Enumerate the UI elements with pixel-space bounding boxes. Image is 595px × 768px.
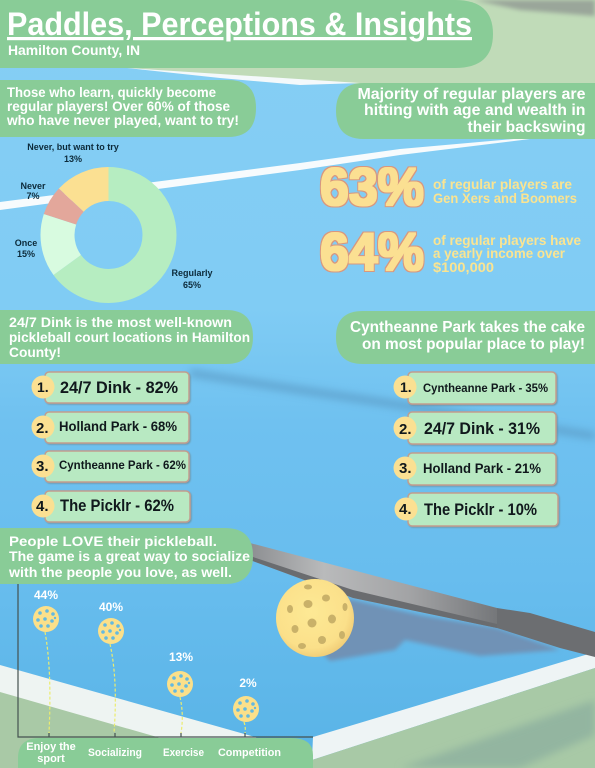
rank 1: 1. [400, 379, 412, 395]
rank 4: 4. [399, 501, 412, 518]
rank 4: The Picklr - 10% [424, 501, 537, 519]
rank 1: 1. [37, 379, 49, 395]
donut chart: player experience: Never [20, 181, 46, 191]
stat: 64 percent: a yearly income over [433, 246, 566, 261]
value: socializing [98, 600, 124, 644]
rank 2: 2. [36, 420, 49, 437]
rank 3: Cyntheanne Park - 62% [59, 460, 186, 472]
category label band: Enjoy the [26, 741, 76, 753]
stat: 63 percent: Gen Xers and Boomers [433, 191, 577, 206]
value: enjoy the sport: 44% [34, 588, 58, 602]
panel: title banner [0, 0, 493, 68]
panel: love pickleball callout: People LOVE their pickleball. [9, 533, 217, 549]
category label band: Socializing [88, 747, 142, 759]
panel: love pickleball callout: with the people you love, as well. [8, 564, 232, 580]
rank 2: 24/7 Dink - 31% [424, 420, 540, 438]
stat: 63 percent [320, 158, 577, 217]
panel: age and wealth callout: their backswing [468, 119, 586, 136]
value: competition [233, 676, 259, 722]
value: competition: 2% [239, 676, 257, 690]
paddle and ball scene [250, 543, 595, 661]
rank 3: 3. [399, 460, 412, 477]
value: socializing: 40% [99, 600, 123, 614]
panel: age and wealth callout: Majority of regular players are [358, 86, 586, 103]
panel: well-known courts callout: pickleball court locations in Hamilton [9, 329, 250, 345]
donut chart: player experience: 65% [183, 280, 201, 290]
subtitle: Hamilton County, IN [8, 42, 140, 58]
panel: well-known courts callout: 24/7 Dink is the most well-known [9, 314, 232, 330]
panel: learn callout: who have never played, want to try! [6, 113, 239, 128]
panel: popular courts callout: on most popular place to play! [362, 336, 585, 353]
donut chart: player experience: Regularly [171, 268, 213, 278]
panel: well-known courts callout: County! [9, 344, 61, 360]
panel: learn callout: Those who learn, quickly become [7, 85, 216, 100]
stems [45, 632, 245, 733]
chart axes [18, 580, 313, 737]
rank 2: Holland Park - 68% [59, 419, 177, 434]
rank 3 [394, 453, 556, 485]
rank 3: 3. [36, 458, 49, 475]
donut chart: player experience: 7% [26, 191, 40, 201]
ranked list: most popular courts [394, 372, 558, 526]
category label band: Exercise [163, 747, 204, 759]
donut chart: player experience: 15% [17, 249, 35, 259]
rank 4: The Picklr - 62% [60, 497, 174, 515]
panel: learn callout: regular players! Over 60% of those [7, 99, 230, 114]
panel: popular courts callout [336, 311, 595, 364]
donut chart: player experience [15, 142, 213, 307]
rank 4: 4. [36, 498, 49, 515]
rank 2: 2. [399, 421, 412, 438]
stat: 64 percent: $100,000 [433, 260, 494, 275]
panel: age and wealth callout [336, 83, 595, 139]
category label band: Competition [218, 747, 281, 759]
stat: 64 percent: 64% [320, 223, 424, 282]
rank 2 [394, 412, 556, 444]
rank 3 [32, 451, 189, 482]
stat: 63 percent: 63% [320, 158, 424, 217]
donut chart: player experience: Once [15, 238, 37, 248]
rank 1: 24/7 Dink - 82% [60, 379, 178, 397]
rank 1: Cyntheanne Park - 35% [423, 383, 548, 395]
rank 2 [32, 412, 189, 443]
rank 1 [32, 372, 189, 403]
value: exercise: 13% [169, 650, 193, 664]
stat: 64 percent: of regular players have [433, 233, 581, 248]
ranked list: most well-known courts [32, 372, 190, 522]
category label band [18, 738, 313, 768]
lollipop chart: why people play [18, 580, 313, 768]
value: exercise [167, 650, 193, 697]
panel: love pickleball callout [0, 528, 253, 584]
donut chart: player experience: 13% [64, 154, 82, 164]
stat: 64 percent [320, 223, 581, 282]
heading: title: Paddles, Perceptions & Insights [7, 6, 472, 42]
panel: age and wealth callout: hitting with age and wealth in [364, 102, 586, 119]
rank 4 [394, 493, 558, 526]
panel: learn callout [0, 80, 256, 137]
panel: popular courts callout: Cyntheanne Park takes the cake [350, 319, 585, 336]
panel: well-known courts callout [0, 310, 253, 364]
rank 1 [394, 372, 556, 404]
rank 4 [32, 491, 190, 522]
rank 3: Holland Park - 21% [423, 461, 541, 476]
category label band: sport [37, 753, 65, 765]
panel: love pickleball callout: The game is a great way to socialize [9, 548, 250, 564]
stat: 63 percent: of regular players are [433, 177, 572, 192]
donut chart: player experience: Never, but want to try [27, 142, 119, 152]
value: enjoy the sport [33, 588, 59, 632]
